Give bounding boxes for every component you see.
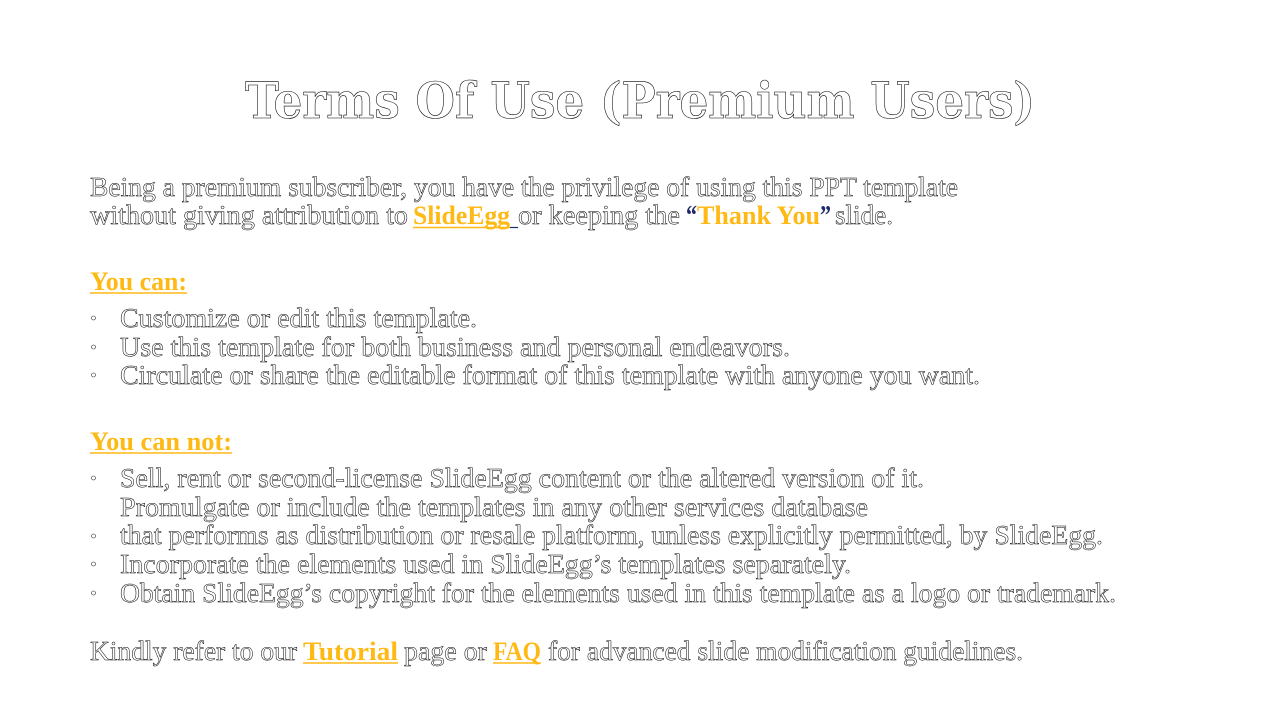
list: prohibited uses: Obtain SlideEgg’s copyright for the elements used in this template as a logo or trademark. (120, 578, 1116, 608)
intro paragraph (90, 172, 958, 230)
list: permitted uses: Circulate or share the editable format of this template with anyone you want. (120, 360, 980, 390)
list: permitted uses: Customize or edit this template. (120, 303, 477, 333)
intro paragraph: Thank You (697, 200, 820, 230)
intro paragraph: ” (820, 200, 831, 230)
list: prohibited uses: that performs as distribution or resale platform, unless explicitly permitted, by SlideEgg. (120, 520, 1103, 550)
intro paragraph: Being a premium subscriber, you have the privilege of using this PPT template (90, 172, 958, 202)
list: prohibited uses: Promulgate or include the templates in any other services database (120, 492, 868, 522)
list: permitted uses: Use this template for both business and personal endeavors. (120, 332, 790, 362)
heading: you can not: You can not: (90, 426, 232, 456)
intro paragraph: without giving attribution to (90, 200, 408, 230)
closing note: page or (404, 636, 487, 666)
title: Terms Of Use (Premium Users) (245, 71, 1035, 130)
closing note: Kindly refer to our (90, 636, 297, 666)
closing note: for advanced slide modification guidelines. (548, 636, 1023, 666)
list: prohibited uses (92, 463, 1116, 608)
intro paragraph: SlideEgg (413, 200, 510, 230)
intro paragraph: “ (686, 200, 697, 230)
list: prohibited uses: Sell, rent or second-license SlideEgg content or the altered version of it. (120, 463, 924, 493)
closing note: FAQ (493, 636, 541, 666)
intro paragraph: slide. (835, 200, 893, 230)
list: prohibited uses: Incorporate the elements used in SlideEgg’s templates separately. (120, 549, 851, 579)
list: permitted uses (92, 303, 980, 390)
closing note: Tutorial (303, 636, 398, 666)
closing note (90, 636, 1023, 666)
heading: you can: You can: (90, 266, 187, 296)
intro paragraph: or keeping the (518, 200, 680, 230)
